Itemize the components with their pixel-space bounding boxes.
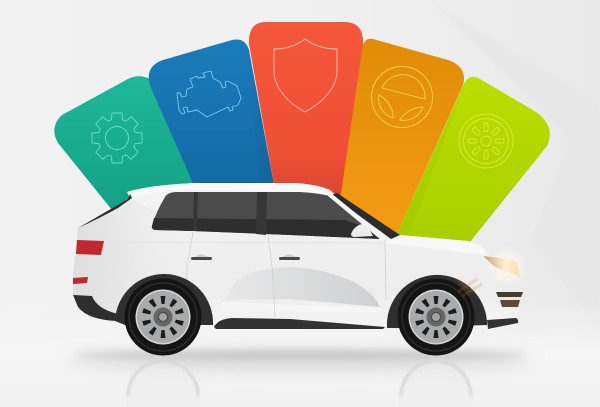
rear wheel <box>124 278 202 356</box>
door sculpting <box>226 267 380 307</box>
side sill <box>214 318 385 329</box>
car reflection <box>126 361 473 407</box>
door lines <box>78 232 386 317</box>
icon: shield <box>274 39 337 112</box>
rear reflector <box>73 277 88 284</box>
window pillars <box>193 192 267 235</box>
ground shadow <box>65 351 535 369</box>
roof highlight <box>127 183 330 196</box>
car <box>73 183 527 356</box>
icon: steering wheel <box>372 66 432 128</box>
front bumper <box>487 318 518 329</box>
door handles <box>191 254 300 260</box>
panel: green wheel card <box>396 77 550 242</box>
tail light <box>76 240 104 255</box>
icon: gear <box>92 113 142 163</box>
front wheel <box>398 278 474 356</box>
lower window band <box>152 218 381 239</box>
rear spoiler <box>78 194 132 228</box>
icon: wheel <box>459 114 513 168</box>
side mirror <box>351 224 373 237</box>
hood highlight <box>385 235 487 255</box>
rear bumper <box>73 295 118 321</box>
side windows <box>152 192 381 239</box>
car body <box>73 183 522 328</box>
white A pillar <box>322 188 386 240</box>
panel: orange steering wheel card <box>335 39 464 236</box>
black windshield <box>331 193 400 239</box>
panel: teal gear card <box>54 76 200 210</box>
front wheel arch <box>387 275 487 328</box>
lens flare <box>458 279 482 296</box>
icon: engine <box>177 71 241 117</box>
rear wheel arch <box>115 274 213 325</box>
panel: red shield card <box>249 22 363 200</box>
panel: blue engine card <box>149 39 275 190</box>
front grille <box>496 292 523 307</box>
headlight <box>483 256 520 277</box>
headlight glow <box>487 246 527 286</box>
